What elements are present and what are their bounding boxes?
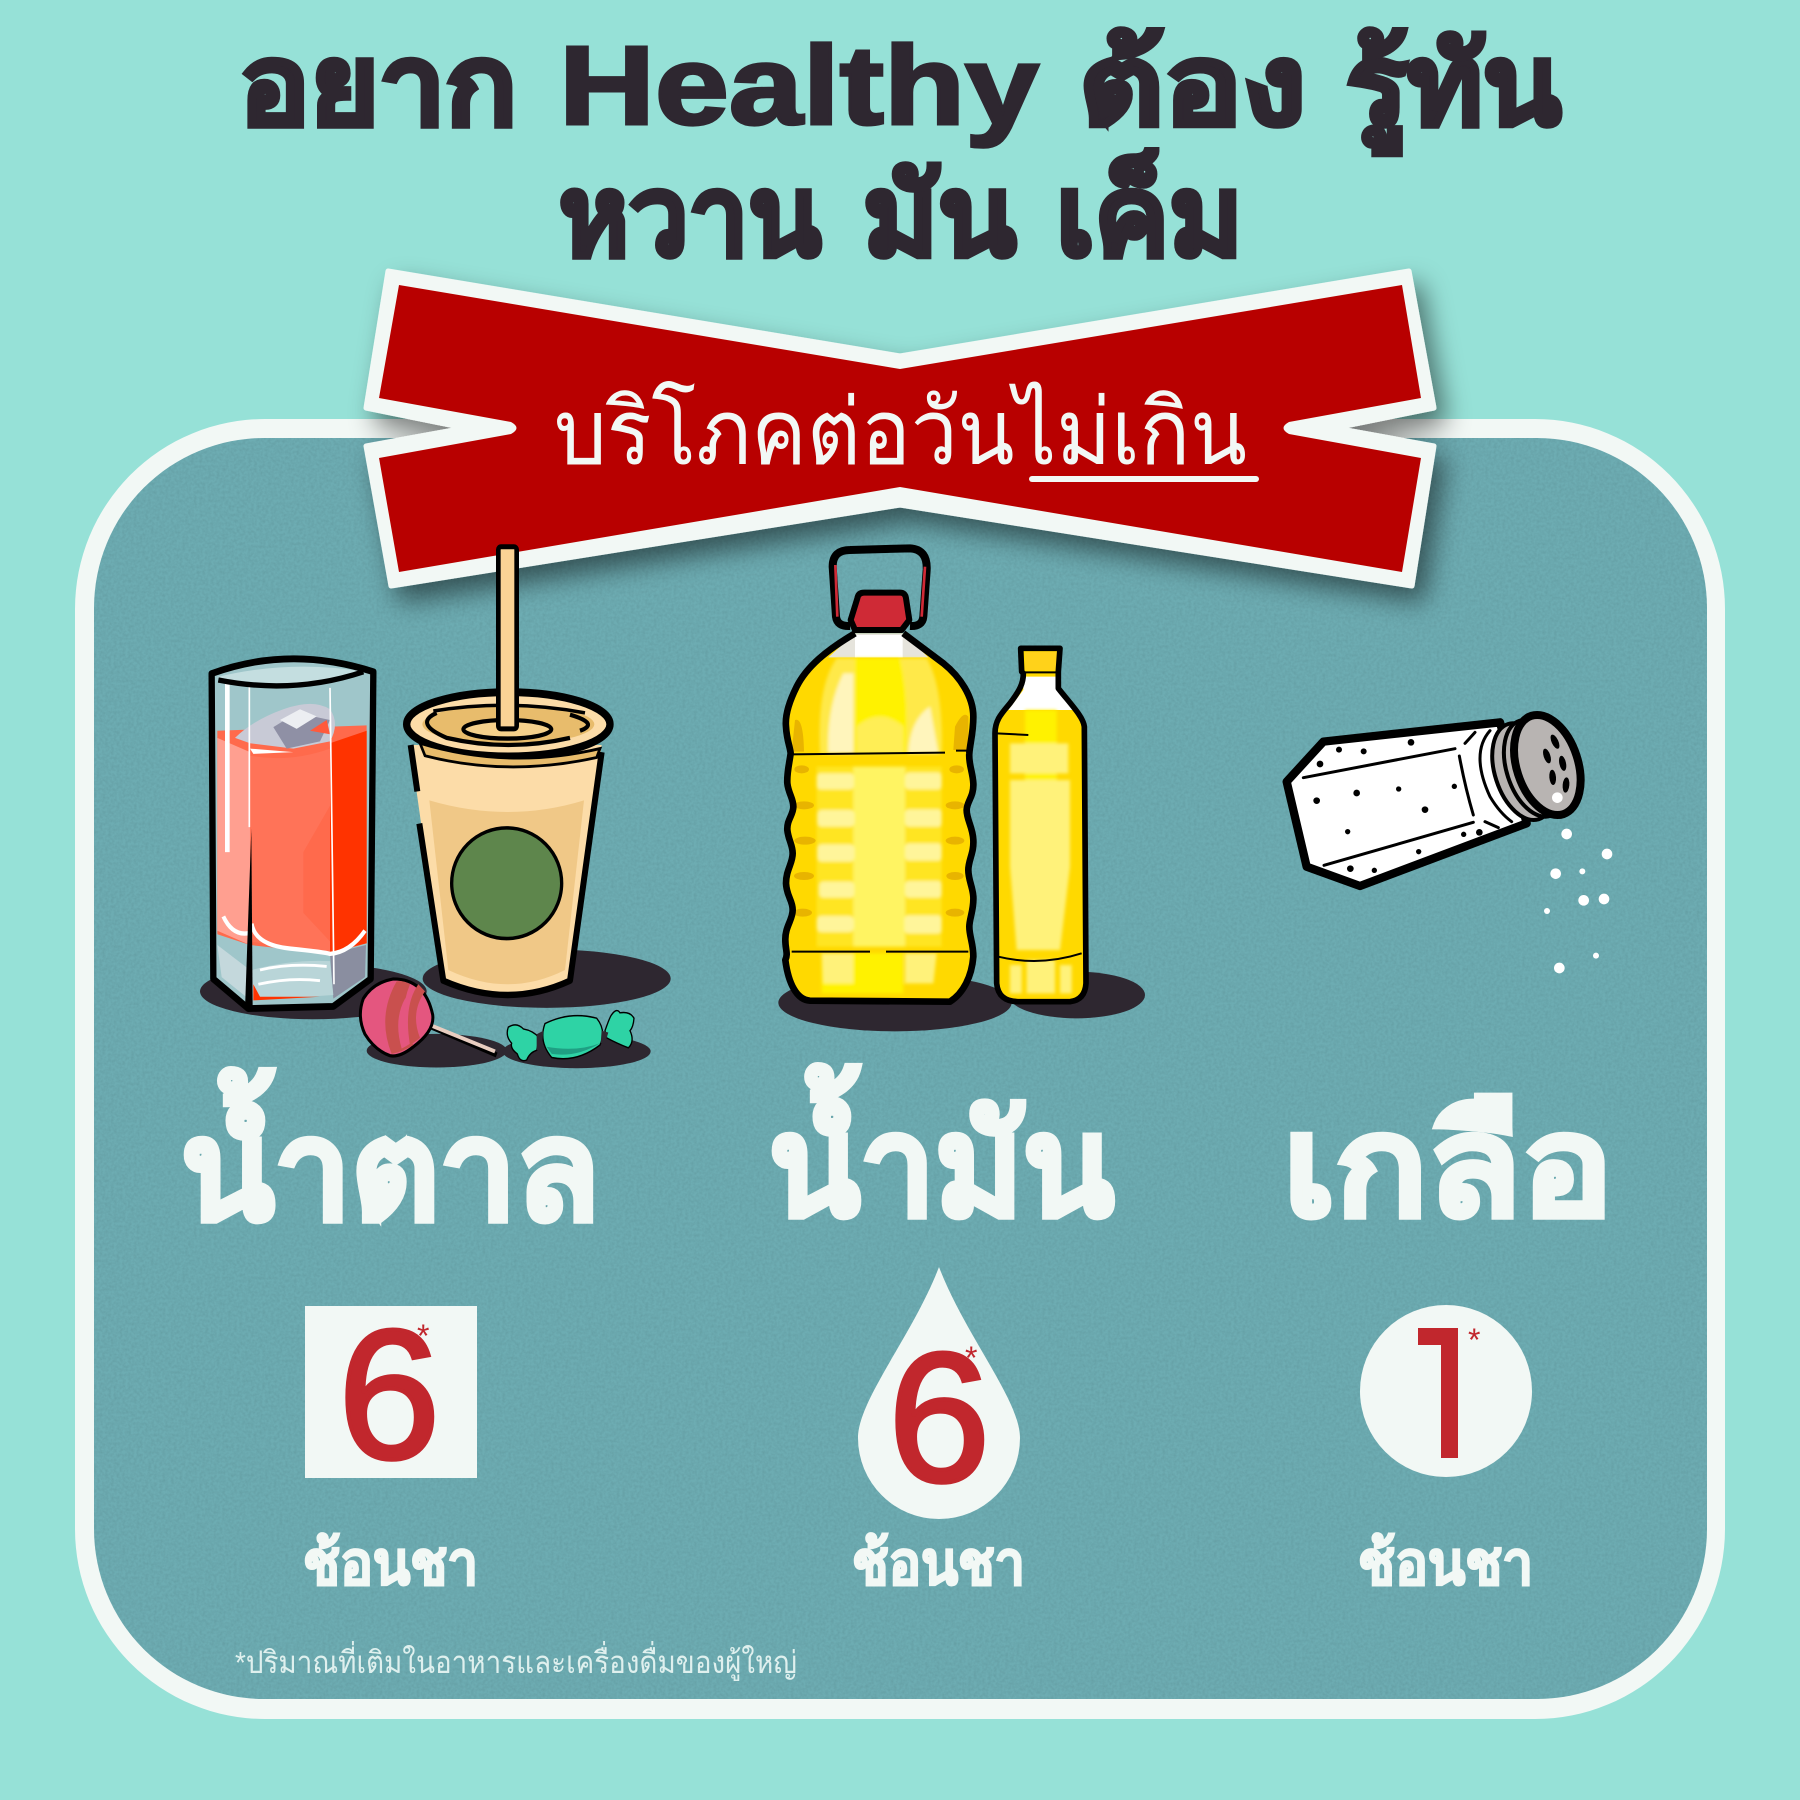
takeaway cup [407,547,610,996]
label: salt: เกลือ [1283,1088,1613,1245]
shaker dots [1313,739,1483,873]
oil amount: drop badge: * [965,1340,977,1376]
title: มัน [863,154,1016,279]
salt amount: circle badge [1360,1305,1532,1477]
illustration: salt shaker [1287,706,1612,973]
sugar amount: square badge: 6 [338,1291,440,1497]
shaker lines [1303,731,1512,865]
title: หวาน [559,154,821,279]
title: รู้ทัน [1346,23,1561,155]
panel: main card [75,419,1725,1719]
illustration: sugar drinks and candy [200,547,671,1068]
sugar amount: square badge [305,1291,477,1497]
salt grains [1544,829,1612,973]
glass of red drink [212,659,373,1009]
title: เค็ม [1056,149,1243,279]
footnote: *ปริมาณที่เติมในอาหารและเครื่องดื่มของผู้ใหญ่ [235,1641,797,1681]
banner text: บริโภคต่อวันไม่เกิน [554,381,1247,484]
title: ต้อง [1079,23,1306,148]
unit label: sugar: ช้อนชา [303,1530,478,1597]
label: oil: น้ำมัน [769,1064,1114,1245]
candy shadows [367,1034,651,1068]
shadows [778,972,1145,1031]
glass shadow [200,964,427,1019]
oil amount: drop badge: 6 [888,1314,990,1520]
illustration: cooking oil bottles [778,548,1145,1031]
large oil bottle [785,548,973,1002]
sugar amount: square badge: * [417,1318,429,1354]
small oil bottle [995,648,1086,1002]
lollipop [360,979,497,1056]
title [239,23,1561,279]
salt amount: circle badge: 1 [1398,1291,1500,1497]
cup shadow [423,949,671,1008]
wrapped candy [507,1011,634,1061]
label: sugar: น้ำตาล [181,1068,600,1249]
shaker cap [1481,706,1592,828]
title: Healthy [559,23,1039,148]
unit label: salt: ช้อนชา [1358,1530,1533,1597]
shaker body [1287,722,1527,886]
unit label: oil: ช้อนชา [852,1530,1025,1597]
title: อยาก [239,23,517,148]
salt amount: circle badge: * [1468,1322,1480,1358]
oil amount: drop badge [858,1267,1020,1520]
banner ribbon [366,271,1434,586]
